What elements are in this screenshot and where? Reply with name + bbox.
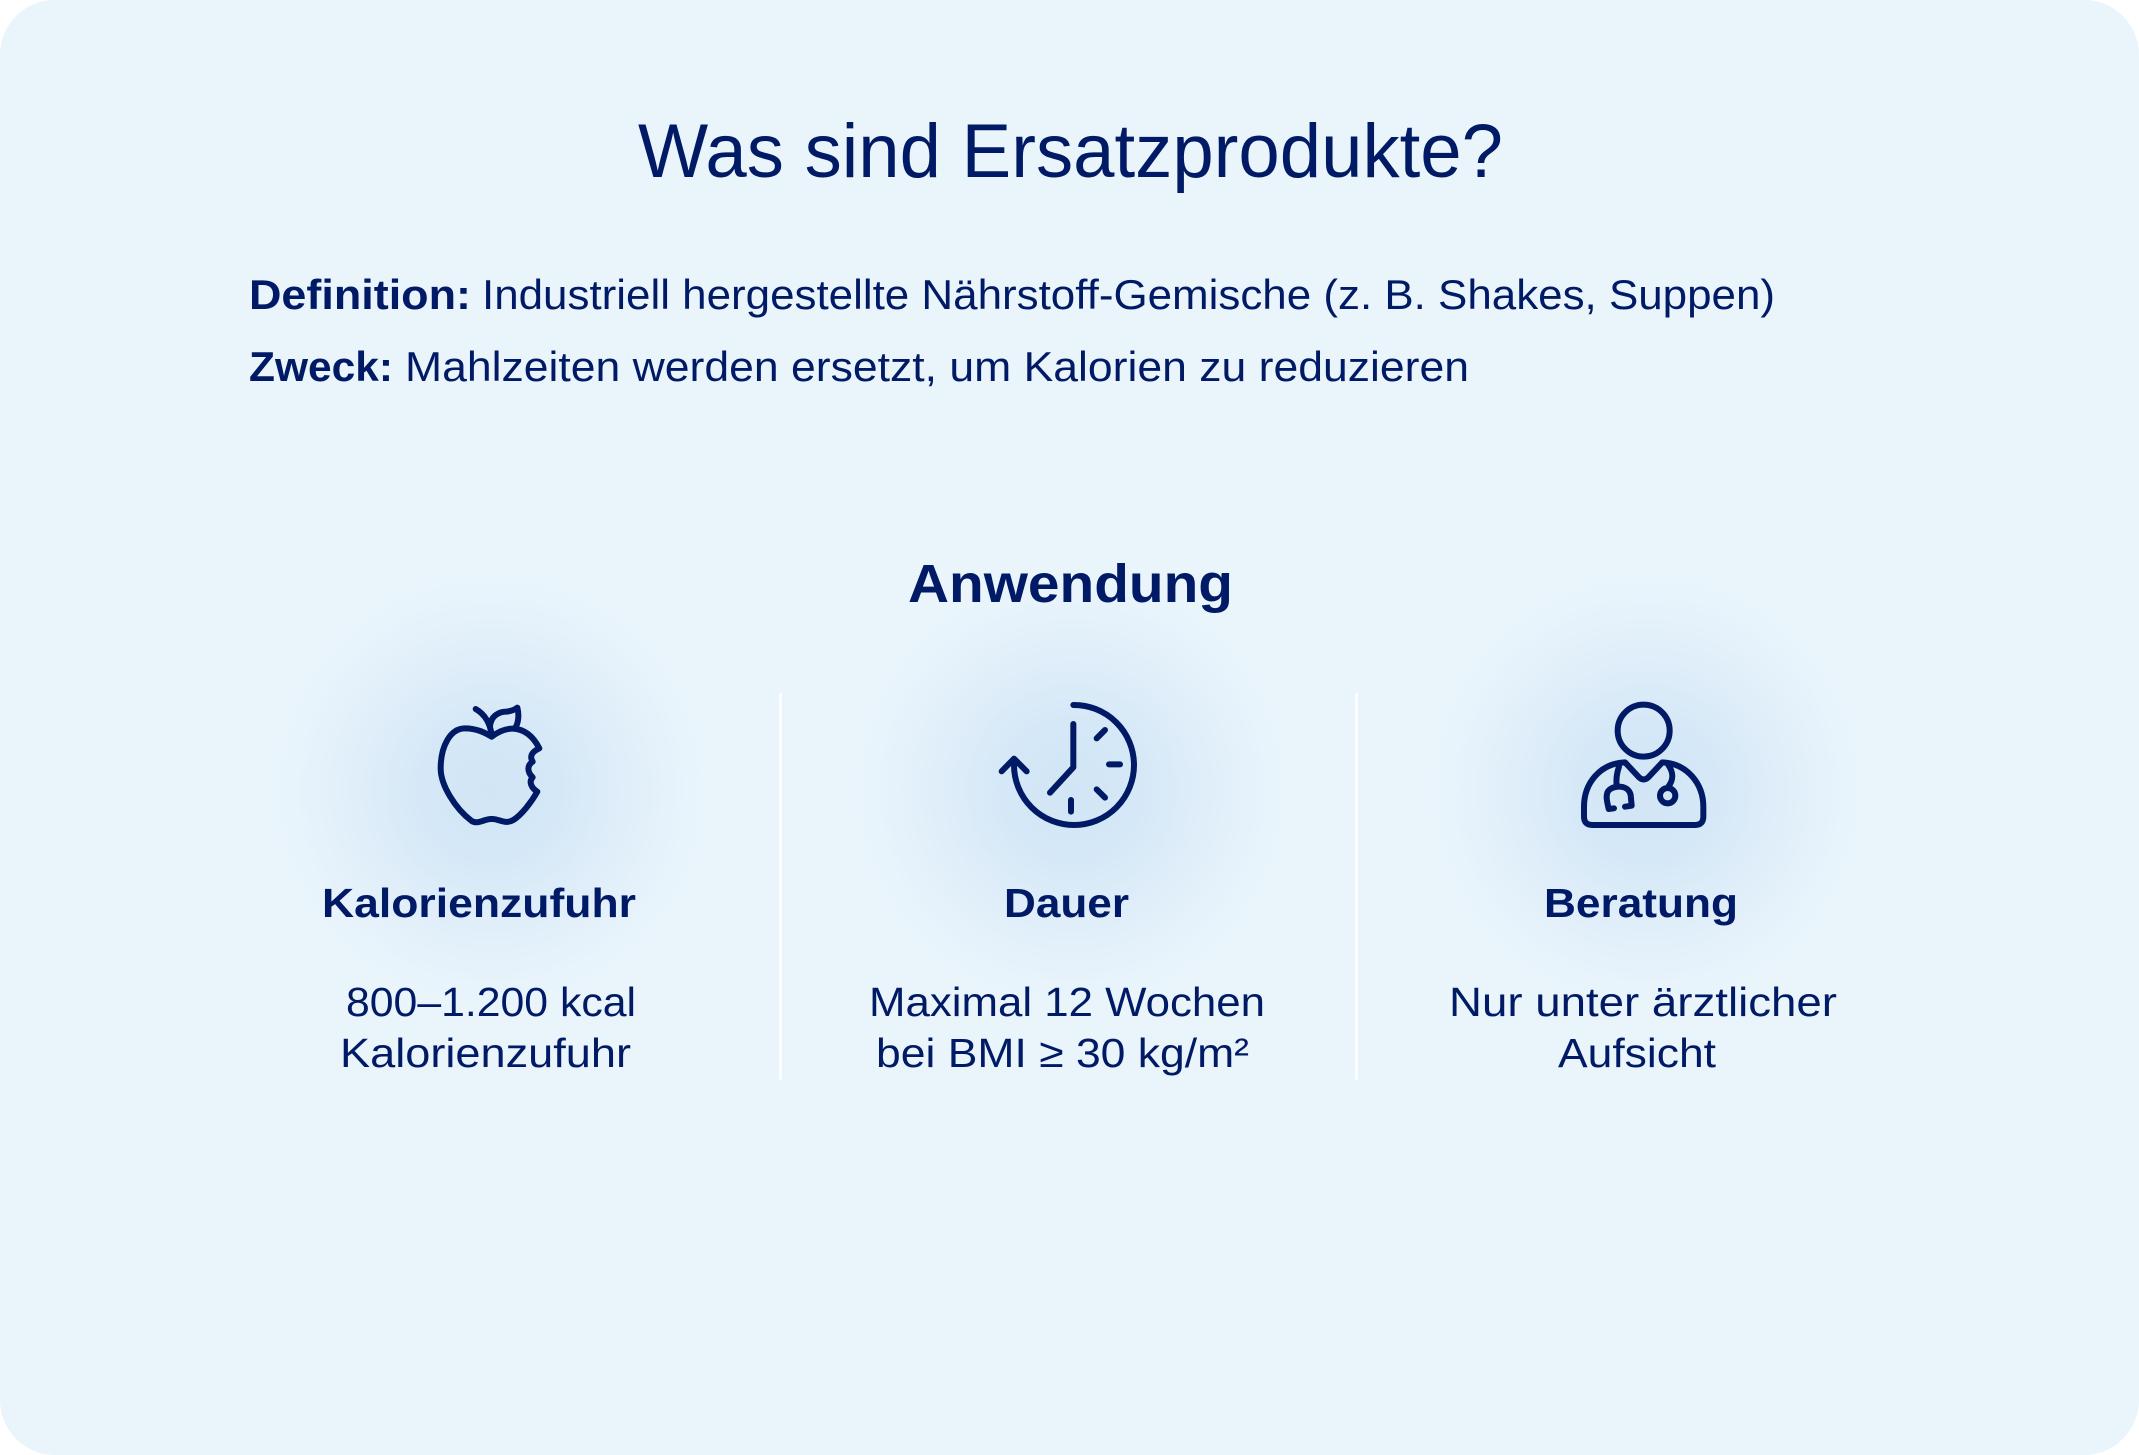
text block: consultation detail: Aufsicht: [1558, 1030, 1717, 1076]
label: Beratung: Beratung: [1544, 880, 1738, 926]
text block: definition: Definition:: [249, 271, 471, 318]
text block: purpose: Mahlzeiten werden ersetzt, um Kalorien zu reduzieren: [405, 343, 1469, 390]
text block: duration detail: Maximal 12 Wochen: [869, 979, 1265, 1025]
icon: doctor with stethoscope: [1584, 705, 1703, 825]
glow: calories: [266, 565, 716, 1015]
text block: calories detail: 800–1.200 kcal: [346, 979, 636, 1025]
glow: consultation: [1422, 565, 1872, 1015]
icon: clock with arrow: [1002, 705, 1134, 825]
icon: bitten apple: [441, 708, 539, 822]
label: Kalorienzufuhr: Kalorienzufuhr: [322, 880, 636, 926]
text block: calories detail: Kalorienzufuhr: [340, 1030, 631, 1076]
text block: consultation detail: [1449, 979, 1837, 1076]
text block: consultation detail: Nur unter ärztlicher: [1449, 979, 1837, 1025]
text block: duration detail: bei BMI ≥ 30 kg/m²: [876, 1030, 1249, 1076]
text block: definition: Industriell hergestellte Nährstoff-Gemische (z. B. Shakes, Suppen): [482, 271, 1775, 318]
text block: purpose: Zweck:: [249, 343, 393, 390]
title: Was sind Ersatzprodukte?: [638, 109, 1503, 194]
heading: Anwendung: Anwendung: [908, 554, 1233, 614]
text block: calories detail: [340, 979, 636, 1076]
glow: duration: [847, 565, 1297, 1015]
text block: duration detail: [869, 979, 1265, 1076]
label: Dauer: Dauer: [1004, 880, 1129, 926]
